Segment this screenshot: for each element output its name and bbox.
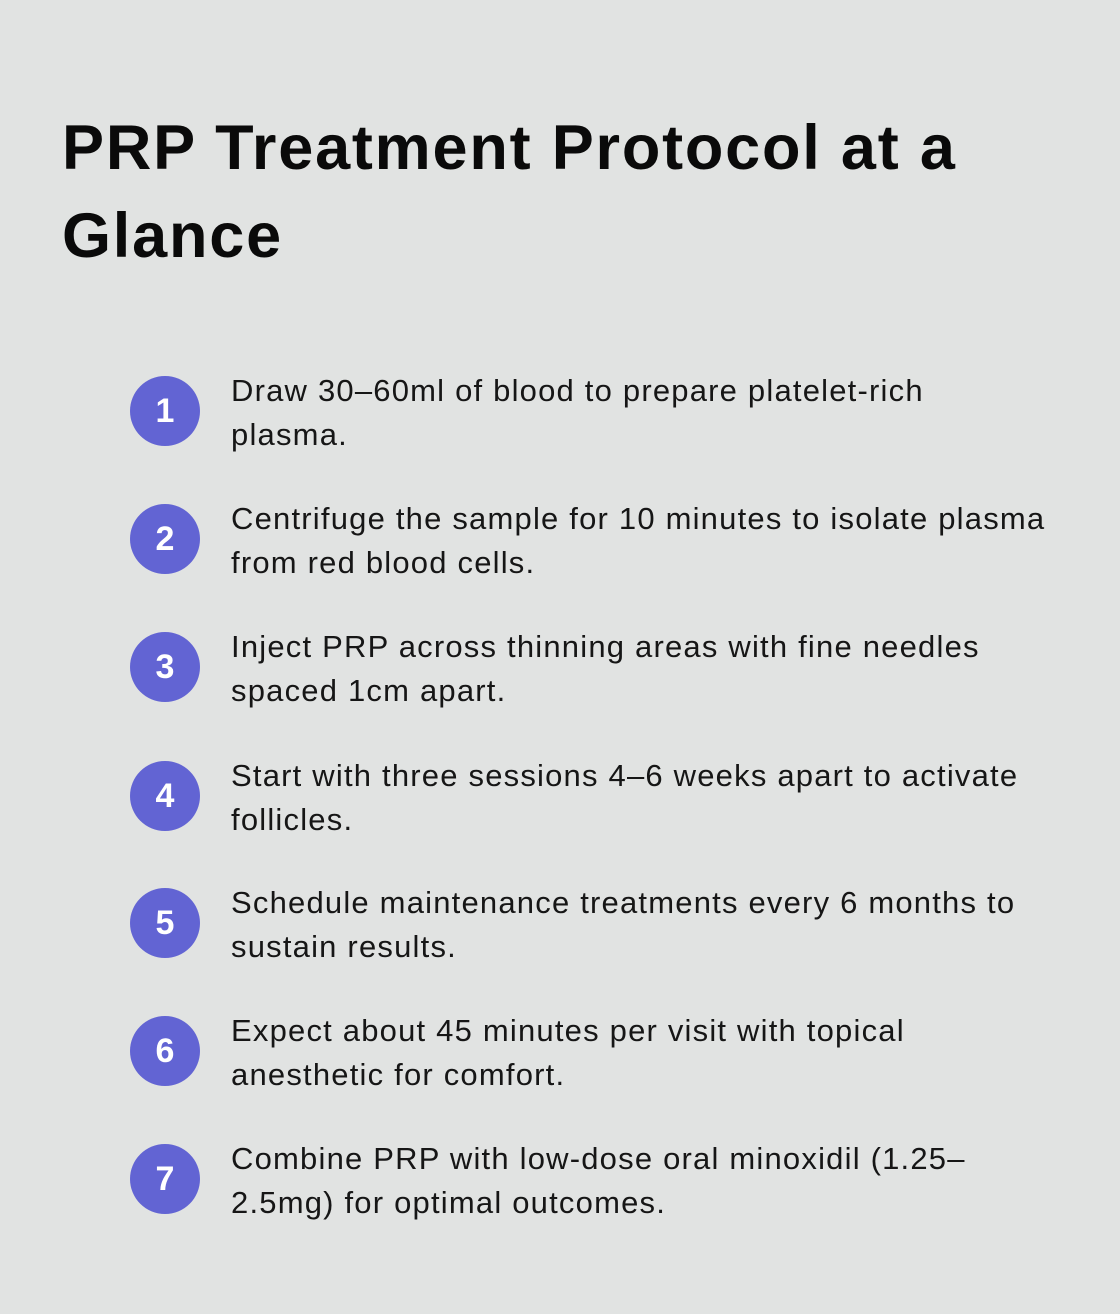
text: step 7: Combine PRP with low-dose oral minoxidil (1.25– (231, 1141, 966, 1176)
icon: number 4 (130, 761, 200, 831)
icon: number 6: 6 (156, 1032, 174, 1070)
title: Glance (62, 201, 283, 271)
title: PRP Treatment Protocol at a (62, 113, 957, 183)
icon: number 2: 2 (156, 520, 174, 558)
icon: number 3 (130, 632, 200, 702)
text: step 4 (231, 758, 1018, 837)
icon: number 7: 7 (156, 1160, 174, 1198)
text: step 3: Inject PRP across thinning areas with fine needles (231, 629, 980, 664)
icon: number 1 (130, 376, 200, 446)
text: step 5: Schedule maintenance treatments every 6 months to (231, 885, 1015, 920)
text: step 6: anesthetic for comfort. (231, 1057, 565, 1092)
text: step 7: 2.5mg) for optimal outcomes. (231, 1185, 666, 1220)
icon: number 3: 3 (156, 648, 174, 686)
text: step 5 (231, 885, 1015, 964)
icon: number 2 (130, 504, 200, 574)
text: step 3: spaced 1cm apart. (231, 673, 506, 708)
text: step 2: from red blood cells. (231, 545, 535, 580)
text: step 1 (231, 373, 924, 452)
step 4 (130, 758, 1018, 837)
text: step 6 (231, 1013, 905, 1092)
text: step 7 (231, 1141, 966, 1220)
text: step 2: Centrifuge the sample for 10 minutes to isolate plasma (231, 501, 1045, 536)
text: step 5: sustain results. (231, 929, 457, 964)
text: step 1: plasma. (231, 417, 348, 452)
step 3 (130, 629, 980, 708)
icon: number 5: 5 (156, 904, 174, 942)
text: step 2 (231, 501, 1045, 580)
step 1 (130, 373, 924, 452)
icon: number 1: 1 (156, 392, 174, 430)
icon: number 4: 4 (156, 776, 174, 814)
icon: number 5 (130, 888, 200, 958)
step 5 (130, 885, 1015, 964)
step 7 (130, 1141, 966, 1220)
icon: number 7 (130, 1144, 200, 1214)
text: step 6: Expect about 45 minutes per visit with topical (231, 1013, 905, 1048)
step 6 (130, 1013, 905, 1092)
step 2 (130, 501, 1045, 580)
text: step 3 (231, 629, 980, 708)
text: step 4: follicles. (231, 802, 353, 837)
text: step 4: Start with three sessions 4–6 weeks apart to activate (231, 758, 1018, 793)
icon: number 6 (130, 1016, 200, 1086)
title (62, 113, 957, 271)
text: step 1: Draw 30–60ml of blood to prepare platelet-rich (231, 373, 924, 408)
